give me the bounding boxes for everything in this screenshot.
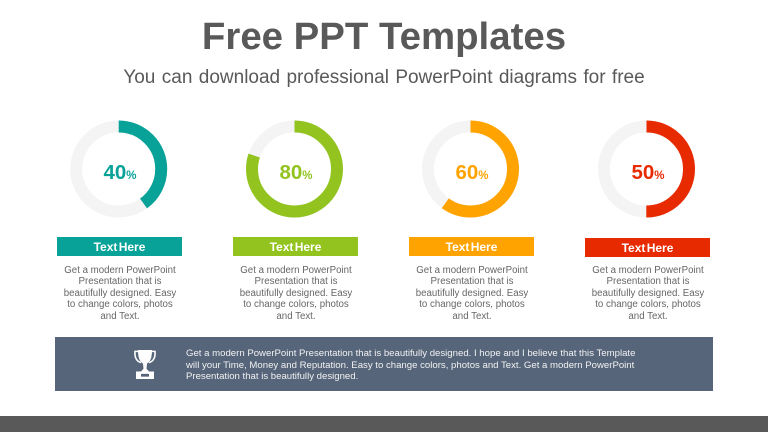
description — [592, 264, 704, 322]
description: and Text. — [628, 310, 668, 322]
description: beautifully designed. Easy — [416, 288, 528, 298]
description: Presentation that is — [607, 276, 689, 287]
label bar: Text Here — [270, 240, 321, 254]
description: and Text. — [452, 310, 492, 322]
description: beautifully designed. Easy — [64, 288, 176, 298]
donut chart: 40% — [70, 120, 168, 218]
panel: 50% — [585, 120, 710, 322]
description: to change colors, photos — [595, 299, 701, 310]
label bar: Text Here — [94, 240, 145, 254]
icon: trophy — [134, 350, 156, 379]
panel: 80% — [233, 120, 358, 322]
label bar: Text Here — [622, 240, 673, 254]
donut chart: 50% — [598, 120, 695, 218]
description: to change colors, photos — [67, 299, 173, 310]
description: Presentation that is — [79, 276, 161, 287]
description: to change colors, photos — [419, 299, 525, 310]
label bar — [57, 237, 182, 256]
description: Get a modern PowerPoint — [64, 264, 176, 276]
description: Presentation that is — [255, 276, 337, 287]
panel: 40% — [57, 120, 182, 322]
description — [64, 264, 176, 322]
percentage: 80%: 80% — [279, 161, 313, 184]
percentage: 50%: 50% — [631, 161, 665, 184]
donut chart: 60% — [422, 120, 519, 218]
label bar: Text Here — [446, 240, 497, 254]
description: beautifully designed. Easy — [592, 288, 704, 298]
description: and Text. — [100, 310, 140, 322]
description: Get a modern PowerPoint — [240, 264, 352, 276]
panel: 60% — [409, 120, 534, 322]
subtitle: You can download professional PowerPoint diagrams for free — [123, 66, 645, 88]
description: Presentation that is — [431, 276, 513, 287]
percentage: 40%: 40% — [103, 161, 137, 184]
banner text — [186, 348, 635, 382]
title: Free PPT Templates — [202, 15, 566, 58]
label bar — [585, 238, 710, 256]
label bar — [409, 237, 534, 256]
donut chart: 80% — [246, 120, 343, 218]
description — [416, 264, 528, 322]
description: and Text. — [276, 310, 316, 322]
description: beautifully designed. Easy — [240, 288, 352, 298]
description: to change colors, photos — [243, 299, 349, 310]
description — [240, 264, 352, 322]
label bar — [233, 237, 358, 256]
panel: summary banner — [55, 337, 713, 391]
description: Get a modern PowerPoint — [592, 264, 704, 276]
percentage: 60%: 60% — [455, 161, 489, 184]
banner text: will your Time, Money and Reputation. Easy to change colors, photos and Text. Get a modern PowerPoint — [186, 360, 634, 370]
banner text: Get a modern PowerPoint Presentation that is beautifully designed. I hope and I believe that this Template — [186, 348, 635, 359]
description: Get a modern PowerPoint — [416, 264, 528, 276]
banner text: Presentation that is beautifully designed. — [186, 371, 358, 382]
footer band — [0, 416, 768, 432]
